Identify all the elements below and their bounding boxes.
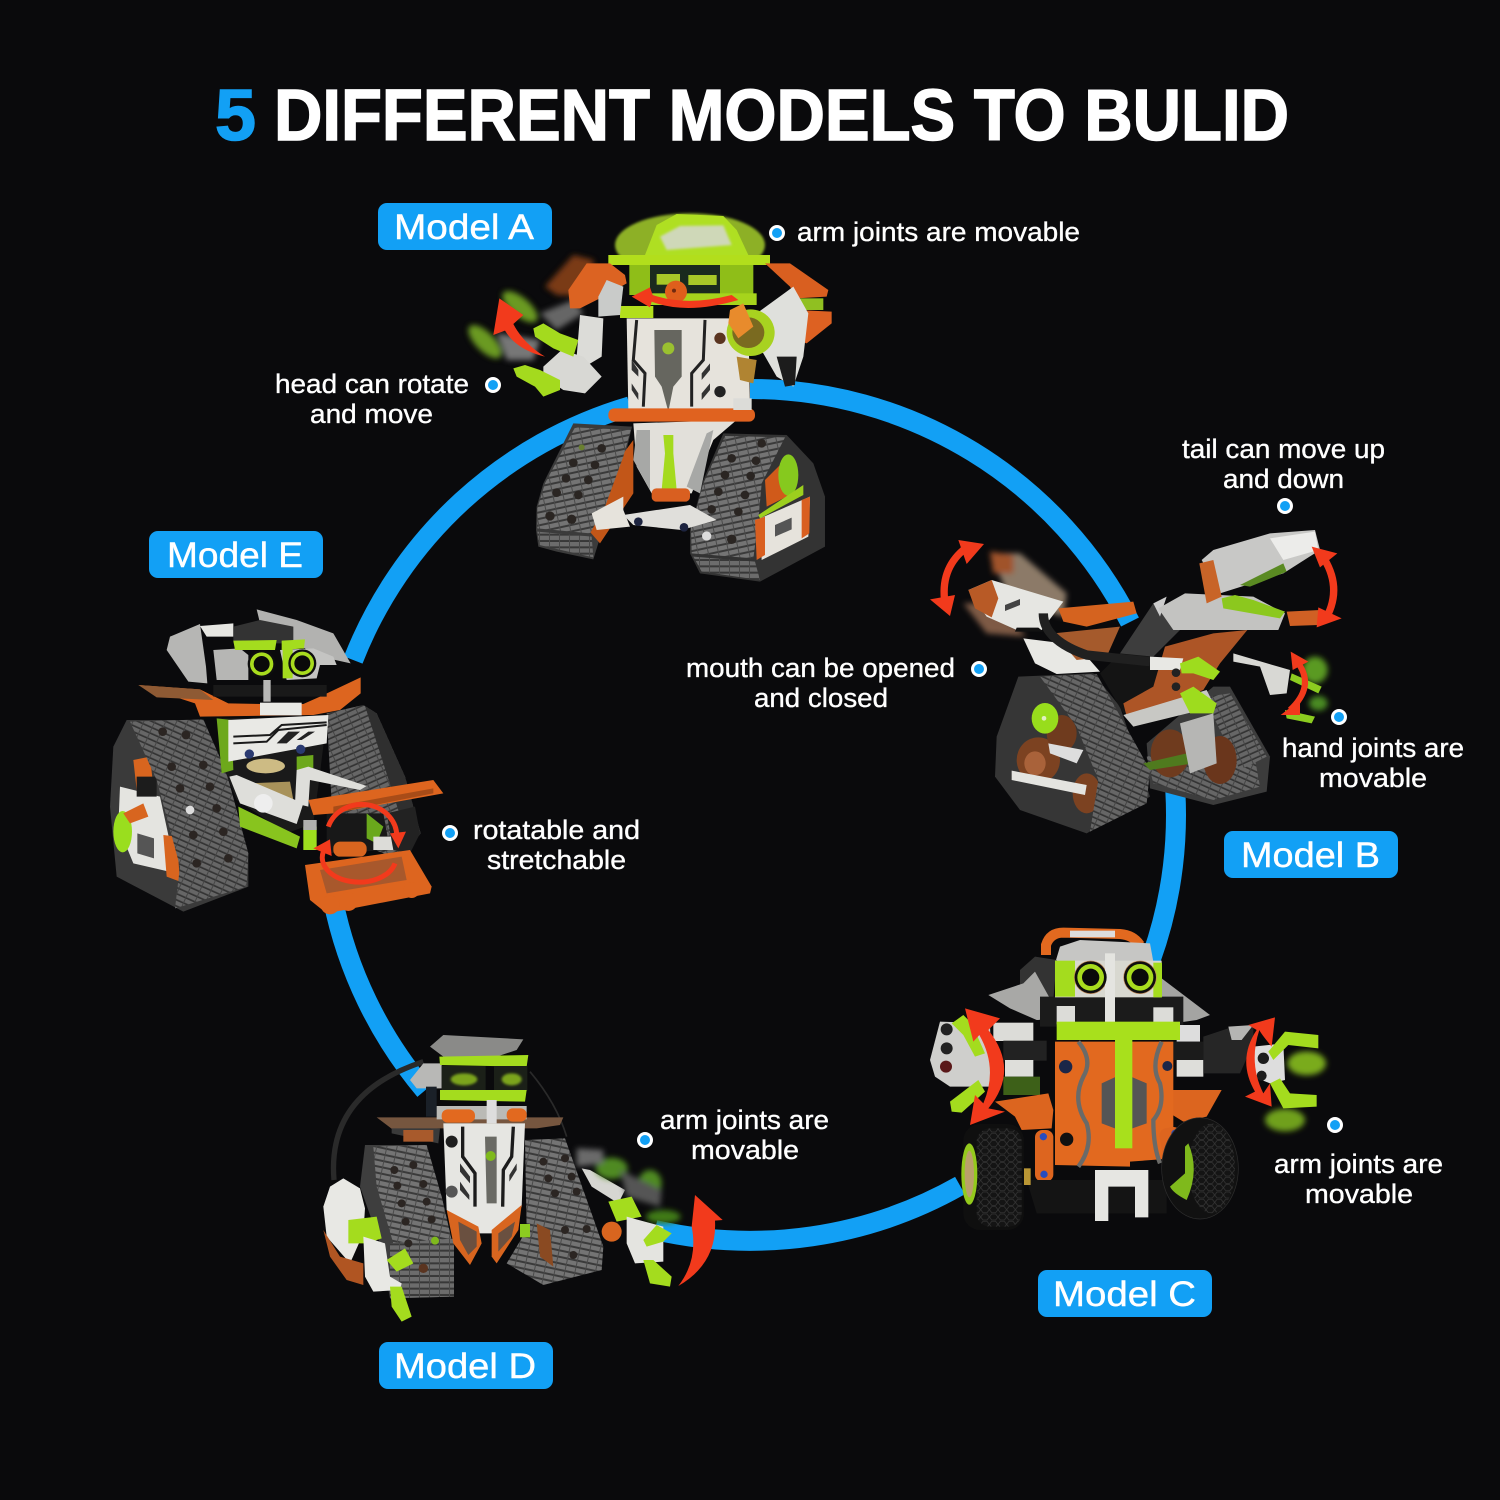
arrow: arm motion [493, 298, 545, 357]
label: Model E [149, 531, 323, 578]
callout: head rotate: head can rotate [275, 369, 469, 399]
label: Model E: Model E [167, 536, 303, 575]
arrow: mouth open and close [930, 540, 984, 616]
callout: arm joints model D: movable [691, 1135, 799, 1165]
callout: mouth: mouth can be opened [686, 653, 955, 683]
robot: model D [323, 1035, 723, 1322]
label: Model D: Model D [394, 1347, 536, 1386]
callout: arm joints model C: movable [1305, 1179, 1413, 1209]
robot: model C [930, 931, 1326, 1230]
callout: hand joints: movable [1319, 763, 1427, 793]
right arm hand [1253, 1032, 1318, 1108]
label: Model C [1038, 1270, 1212, 1317]
callout: rotatable: stretchable [487, 845, 626, 875]
arrow: hand joints [1281, 652, 1308, 715]
callout: head rotate: and move [310, 399, 433, 429]
callout: hand joints: hand joints are [1282, 733, 1464, 763]
callout: rotatable: rotatable and [473, 815, 640, 845]
arrow: left arm joints [965, 1008, 1005, 1125]
label: Model B [1224, 831, 1398, 878]
label: Model D [379, 1342, 553, 1389]
arrow: arm joint up [678, 1195, 723, 1286]
robot: model E [110, 609, 443, 914]
callout: arm joints model A: arm joints are movable [797, 217, 1080, 247]
title: DIFFERENT MODELS TO BULID [274, 76, 1289, 156]
callout: hand joints [1282, 710, 1464, 793]
truss frame [229, 767, 367, 824]
left arm hand [930, 1015, 992, 1113]
callout: tail: and down [1223, 464, 1344, 494]
callout: rotatable [444, 815, 640, 875]
label: Model A [378, 203, 552, 250]
callout: tail: tail can move up [1182, 434, 1385, 464]
callout: head rotate [275, 369, 500, 429]
title: 5 [215, 76, 256, 156]
arrow: right arm joints [1245, 1017, 1275, 1107]
blue cycle ring [333, 389, 1176, 1241]
label: Model B: Model B [1241, 836, 1380, 875]
callout: arm joints model C: arm joints are [1274, 1149, 1443, 1179]
callout: arm joints model D: arm joints are [660, 1105, 829, 1135]
callout: arm joints model D [638, 1105, 829, 1165]
callout: arm joints model C [1274, 1118, 1443, 1209]
arrow: rotate and stretch [313, 804, 406, 882]
callout: mouth [686, 653, 986, 713]
robot: model A [463, 213, 832, 582]
label: Model A: Model A [394, 208, 535, 247]
callout: mouth: and closed [754, 683, 888, 713]
arrow: head rotation [632, 287, 738, 308]
robot: model B [930, 530, 1342, 833]
arrow: tail up and down [1312, 547, 1342, 627]
callout: tail [1182, 434, 1385, 512]
label: Model C: Model C [1053, 1275, 1196, 1314]
